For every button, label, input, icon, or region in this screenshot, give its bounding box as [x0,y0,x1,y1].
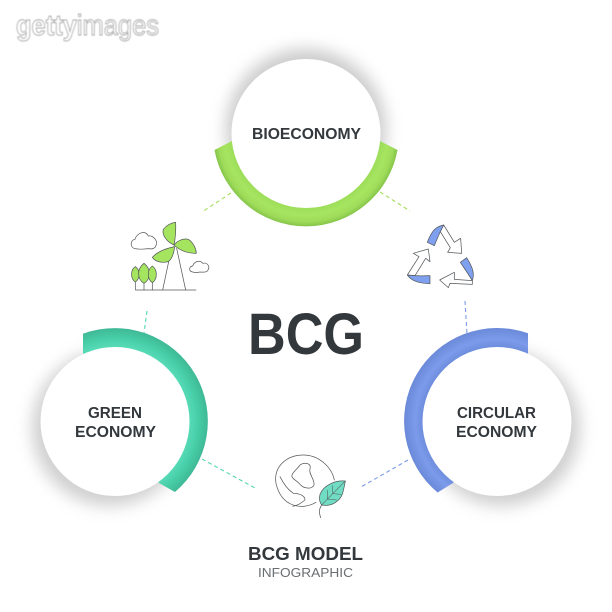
subtitle: BCG MODEL: BCG MODEL [248,543,363,564]
label: bioeconomy: BIOECONOMY [252,126,361,143]
connector: green economy to globe icon [202,459,255,488]
label: circular economy [456,405,537,441]
icon: wind turbine and trees [131,222,209,290]
watermark: gettyimages: gettyimages [16,10,159,42]
connector: recycle icon to circular economy [465,301,467,334]
panel: circular economy [404,328,580,506]
connector: bioeconomy to recycle icon [380,192,410,211]
connector: wind icon to green economy [144,311,147,333]
label: green economy: GREEN [88,405,142,422]
panel: green economy [32,328,208,506]
icon: globe and leaf [276,455,345,518]
subtitle: INFOGRAPHIC: INFOGRAPHIC [258,565,353,580]
label: green economy: ECONOMY [75,424,156,441]
title: BCG: BCG [248,302,364,367]
label: green economy [75,405,156,441]
label: circular economy: ECONOMY [456,424,537,441]
panel: bioeconomy [214,49,398,226]
connector: circular economy to globe icon [361,460,408,487]
icon: recycling arrows [407,225,473,288]
label: circular economy: CIRCULAR [457,405,536,422]
connector: bioeconomy to wind icon [202,193,231,212]
